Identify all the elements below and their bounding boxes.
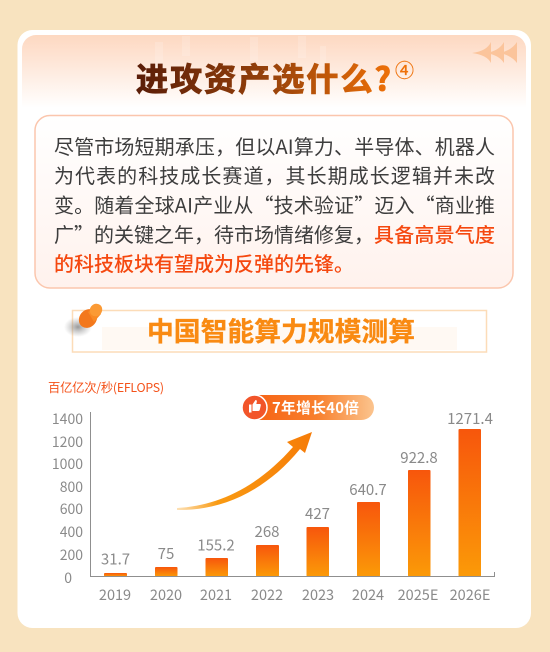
y axis ticks: 400 [60,522,83,542]
decorative candlesticks [155,36,326,68]
title: 进攻资产选什么? [136,54,391,100]
x axis years: 2020 [150,584,182,605]
value labels: 640.7 [349,479,387,500]
paragraph: 为代表的科技成长赛道，其长期成长逻辑并未改 [54,160,495,189]
banner heading: 中国智能算力规模测算 [147,310,415,349]
y axis ticks: 1200 [52,432,83,452]
y axis ticks: 200 [60,545,83,565]
value labels: 155.2 [197,534,235,556]
x axis years: 2022 [251,584,283,605]
x axis years [99,584,490,605]
y axis ticks: 0 [64,568,72,588]
value labels: 31.7 [101,548,130,570]
x axis years: 2023 [302,584,334,605]
panel: intro text [35,116,513,288]
icon: triple left arrows [472,42,517,63]
paragraph: 的科技板块有望成为反弹的先锋。 [54,248,354,277]
section banner [72,310,486,352]
paragraph [54,131,495,277]
paragraph: 尽管市场短期承压，但以AI算力、半导体、机器人 [54,131,495,160]
icon: thumbs up [242,395,267,420]
value labels: 1271.4 [447,408,493,429]
value labels: 268 [255,521,279,542]
value labels [101,408,493,570]
paragraph: 具备高景气度 [374,219,495,248]
x axis years: 2019 [99,584,131,605]
x axis years: 2021 [200,584,232,605]
axis line [90,412,494,576]
y axis ticks: 1000 [52,454,83,474]
y axis ticks: 800 [60,477,83,497]
growth arrow [177,432,312,510]
icon: pushpin [64,301,105,337]
header gradient band [22,35,526,108]
y axis ticks [52,409,83,588]
value labels: 75 [158,543,174,564]
y axis ticks: 1400 [52,409,83,429]
bar chart [52,408,494,605]
value labels: 427 [305,503,330,524]
y axis unit label: 百亿亿次/秒(EFLOPS) [48,378,164,396]
y axis ticks: 600 [60,499,83,519]
growth callout pill [242,395,374,420]
paragraph: 变。随着全球AI产业从“技术验证”迈入“商业推 [54,190,495,218]
value labels: 922.8 [400,447,438,468]
x axis years: 2024 [352,584,384,605]
paragraph: 广”的关键之年，待市场情绪修复， [54,219,374,248]
bars [104,429,481,576]
x axis years: 2025E [398,584,438,605]
x axis years: 2026E [450,584,490,605]
title footnote marker: ④ [395,56,414,83]
growth callout pill: 7年增长40倍 [272,397,359,418]
